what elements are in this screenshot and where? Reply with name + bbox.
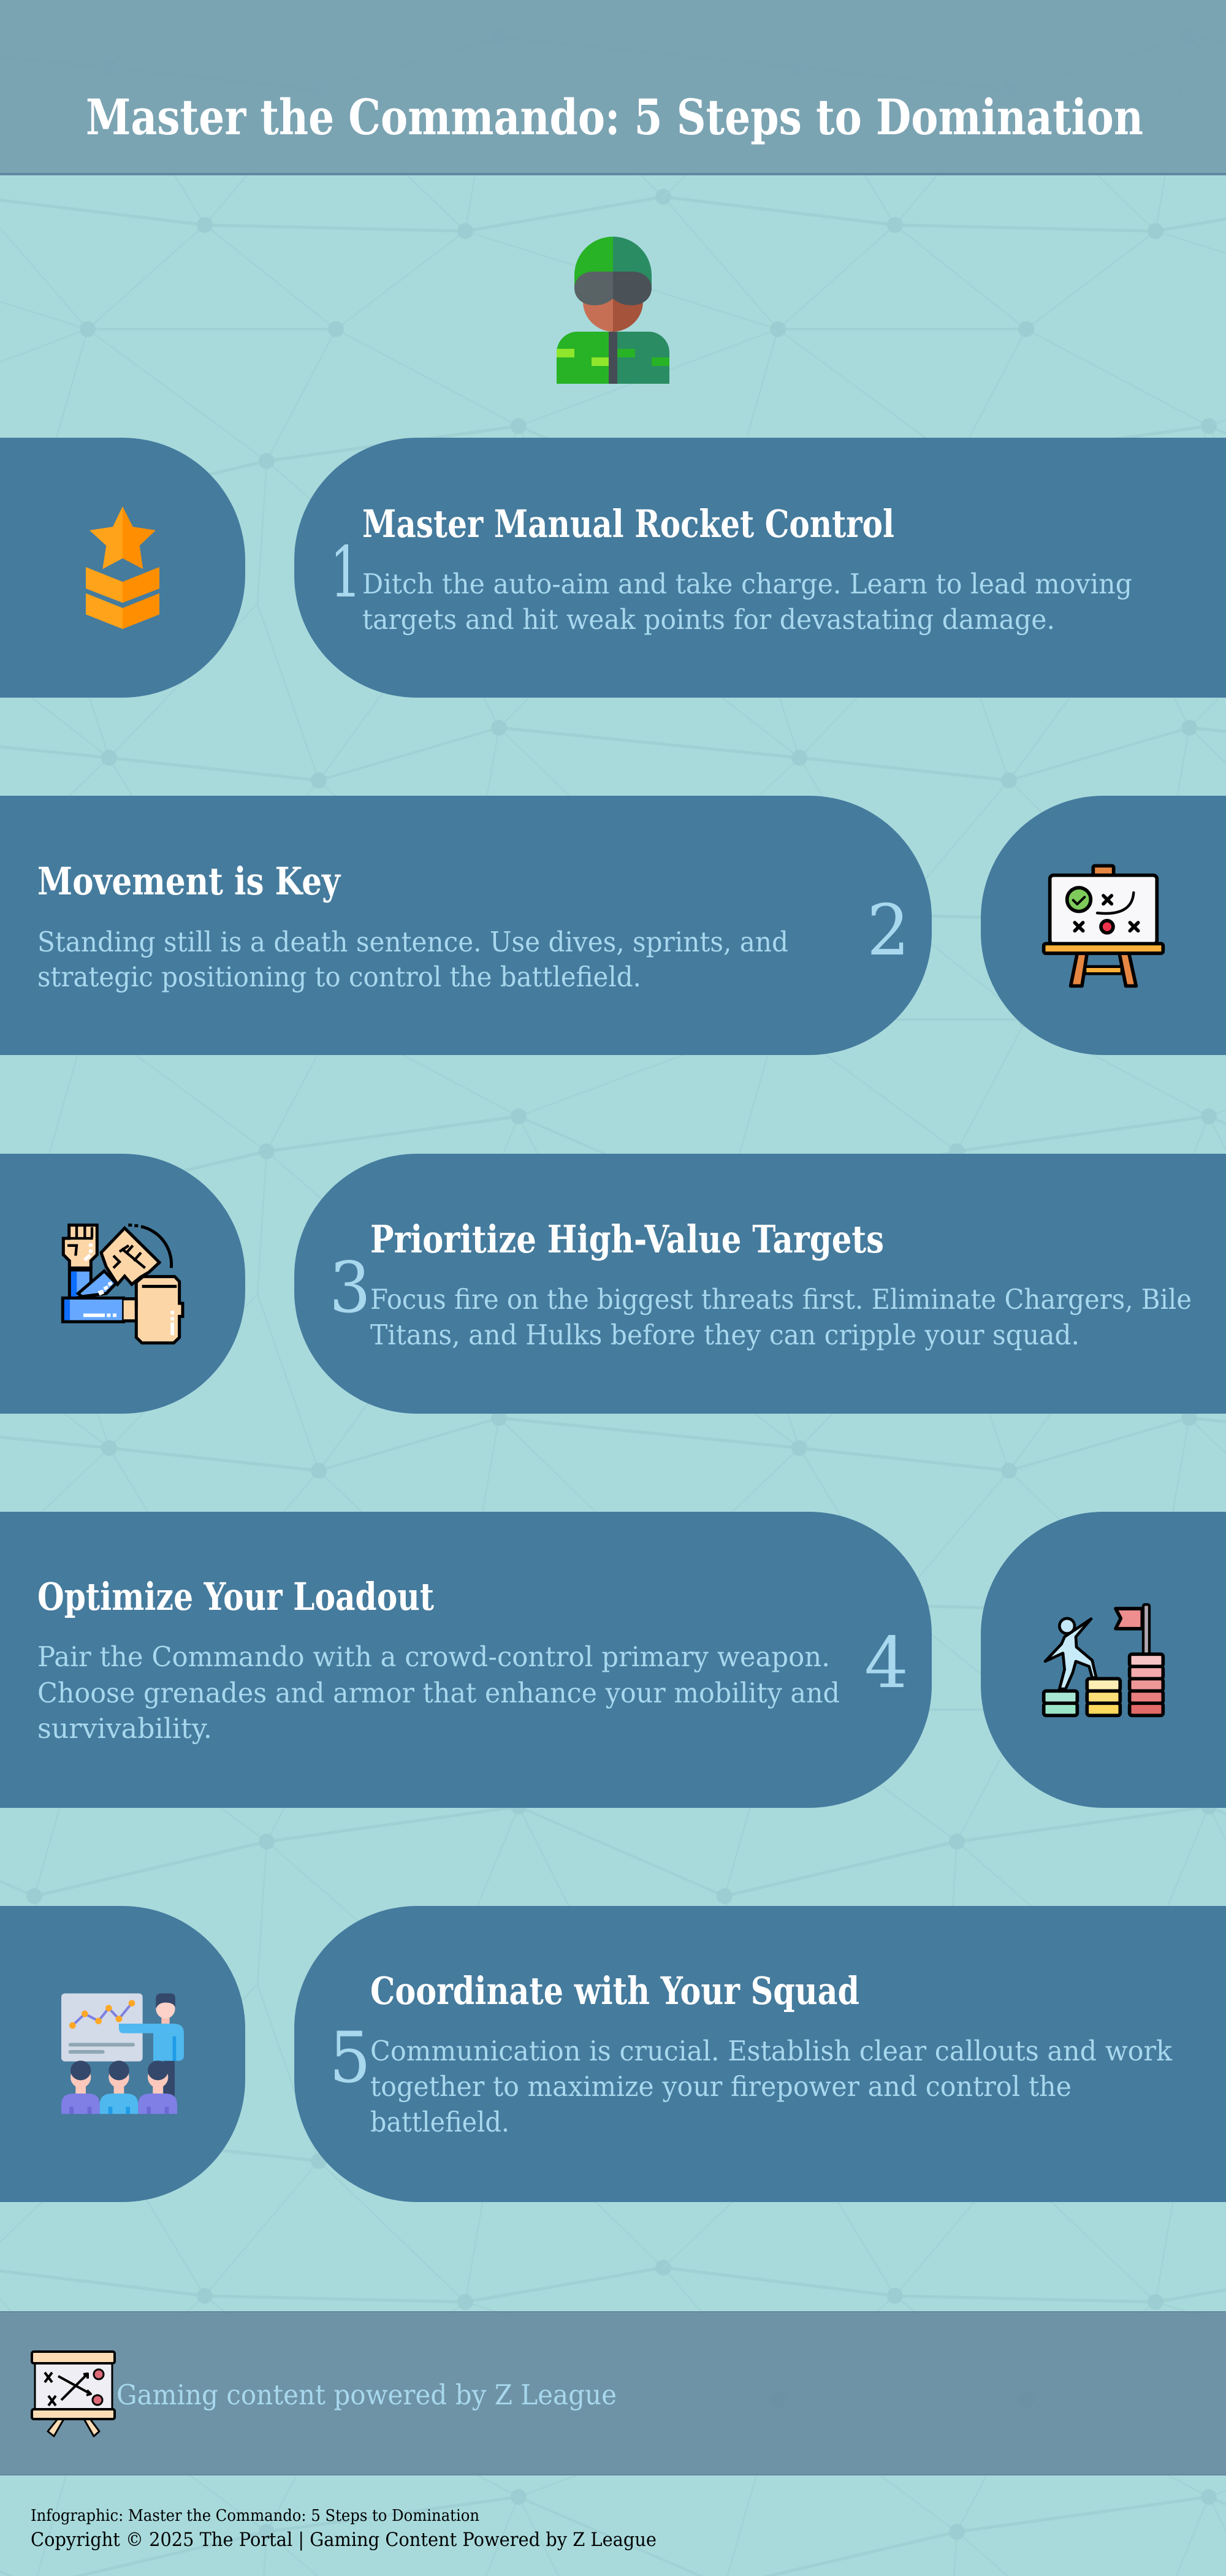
header banner (0, 0, 1226, 175)
panel: step 5 text pill (294, 1906, 1226, 2202)
step 3 (0, 1154, 1226, 1414)
number 4: 4 (864, 1622, 908, 1704)
step 4 description: survivability. (37, 1712, 212, 1745)
panel: step 3 icon circle (0, 1154, 245, 1414)
panel: step 5 icon circle (0, 1906, 245, 2202)
panel: step 1 icon circle (0, 438, 245, 698)
panel: step 2 icon circle (981, 796, 1226, 1055)
number 2: 2 (867, 890, 910, 971)
source line: Infographic: Master the Commando: 5 Steps to Domination (31, 2507, 479, 2525)
step 5 heading: Coordinate with Your Squad (370, 1968, 859, 2013)
panel: step 4 icon circle (981, 1512, 1226, 1808)
icon: star rank (86, 506, 159, 629)
footer band (0, 2311, 1226, 2475)
panel: step 4 text pill (0, 1512, 932, 1808)
footer tagline: Gaming content powered by Z League (116, 2379, 617, 2411)
step 1 description (362, 568, 1132, 636)
step 5 description: Communication is crucial. Establish clear callouts and work (370, 2035, 1173, 2067)
number 5: 5 (329, 2017, 371, 2098)
number 1: 1 (330, 532, 362, 613)
step 3 description: Titans, and Hulks before they can cripple your squad. (370, 1319, 1079, 1351)
step 1 description: targets and hit weak points for devastating damage. (362, 603, 1055, 636)
icon: climbing stacks with flag (1044, 1604, 1163, 1715)
step 1 heading: Master Manual Rocket Control (362, 501, 894, 546)
step 1 description: Ditch the auto-aim and take charge. Learn to lead moving (362, 568, 1132, 600)
step 2 description: strategic positioning to control the battlefield. (37, 961, 641, 993)
step 4 heading: Optimize Your Loadout (37, 1574, 434, 1619)
icon: tactics easel (1044, 866, 1163, 986)
step 3 description (370, 1283, 1192, 1351)
step 5 description (370, 2035, 1173, 2138)
step 2 heading: Movement is Key (37, 859, 341, 904)
step 5 description: together to maximize your firepower and control the (370, 2070, 1072, 2103)
step 5 (0, 1906, 1226, 2202)
step 2 description: Standing still is a death sentence. Use dives, sprints, and (37, 926, 788, 958)
number 3: 3 (329, 1247, 371, 1328)
step 2 (0, 796, 1226, 1055)
icon: soldier (557, 237, 669, 384)
step 4 description: Pair the Commando with a crowd-control primary weapon. (37, 1640, 830, 1673)
step 3 heading: Prioritize High-Value Targets (370, 1217, 884, 1262)
panel: step 2 text pill (0, 796, 932, 1055)
step 5 description: battlefield. (370, 2106, 509, 2138)
step 4 (0, 1512, 1226, 1808)
panel: step 3 text pill (294, 1154, 1226, 1414)
copyright line: Copyright © 2025 The Portal | Gaming Content Powered by Z League (31, 2529, 657, 2551)
panel: step 1 text pill (294, 438, 1226, 698)
step 4 description: Choose grenades and armor that enhance your mobility and (37, 1677, 840, 1709)
step 4 description (37, 1640, 840, 1745)
icon: raised fists (63, 1224, 183, 1343)
icon: presenter and audience (61, 1994, 184, 2114)
step 1 (0, 438, 1226, 698)
step 2 description (37, 926, 788, 993)
icon: strategy board (32, 2352, 115, 2436)
